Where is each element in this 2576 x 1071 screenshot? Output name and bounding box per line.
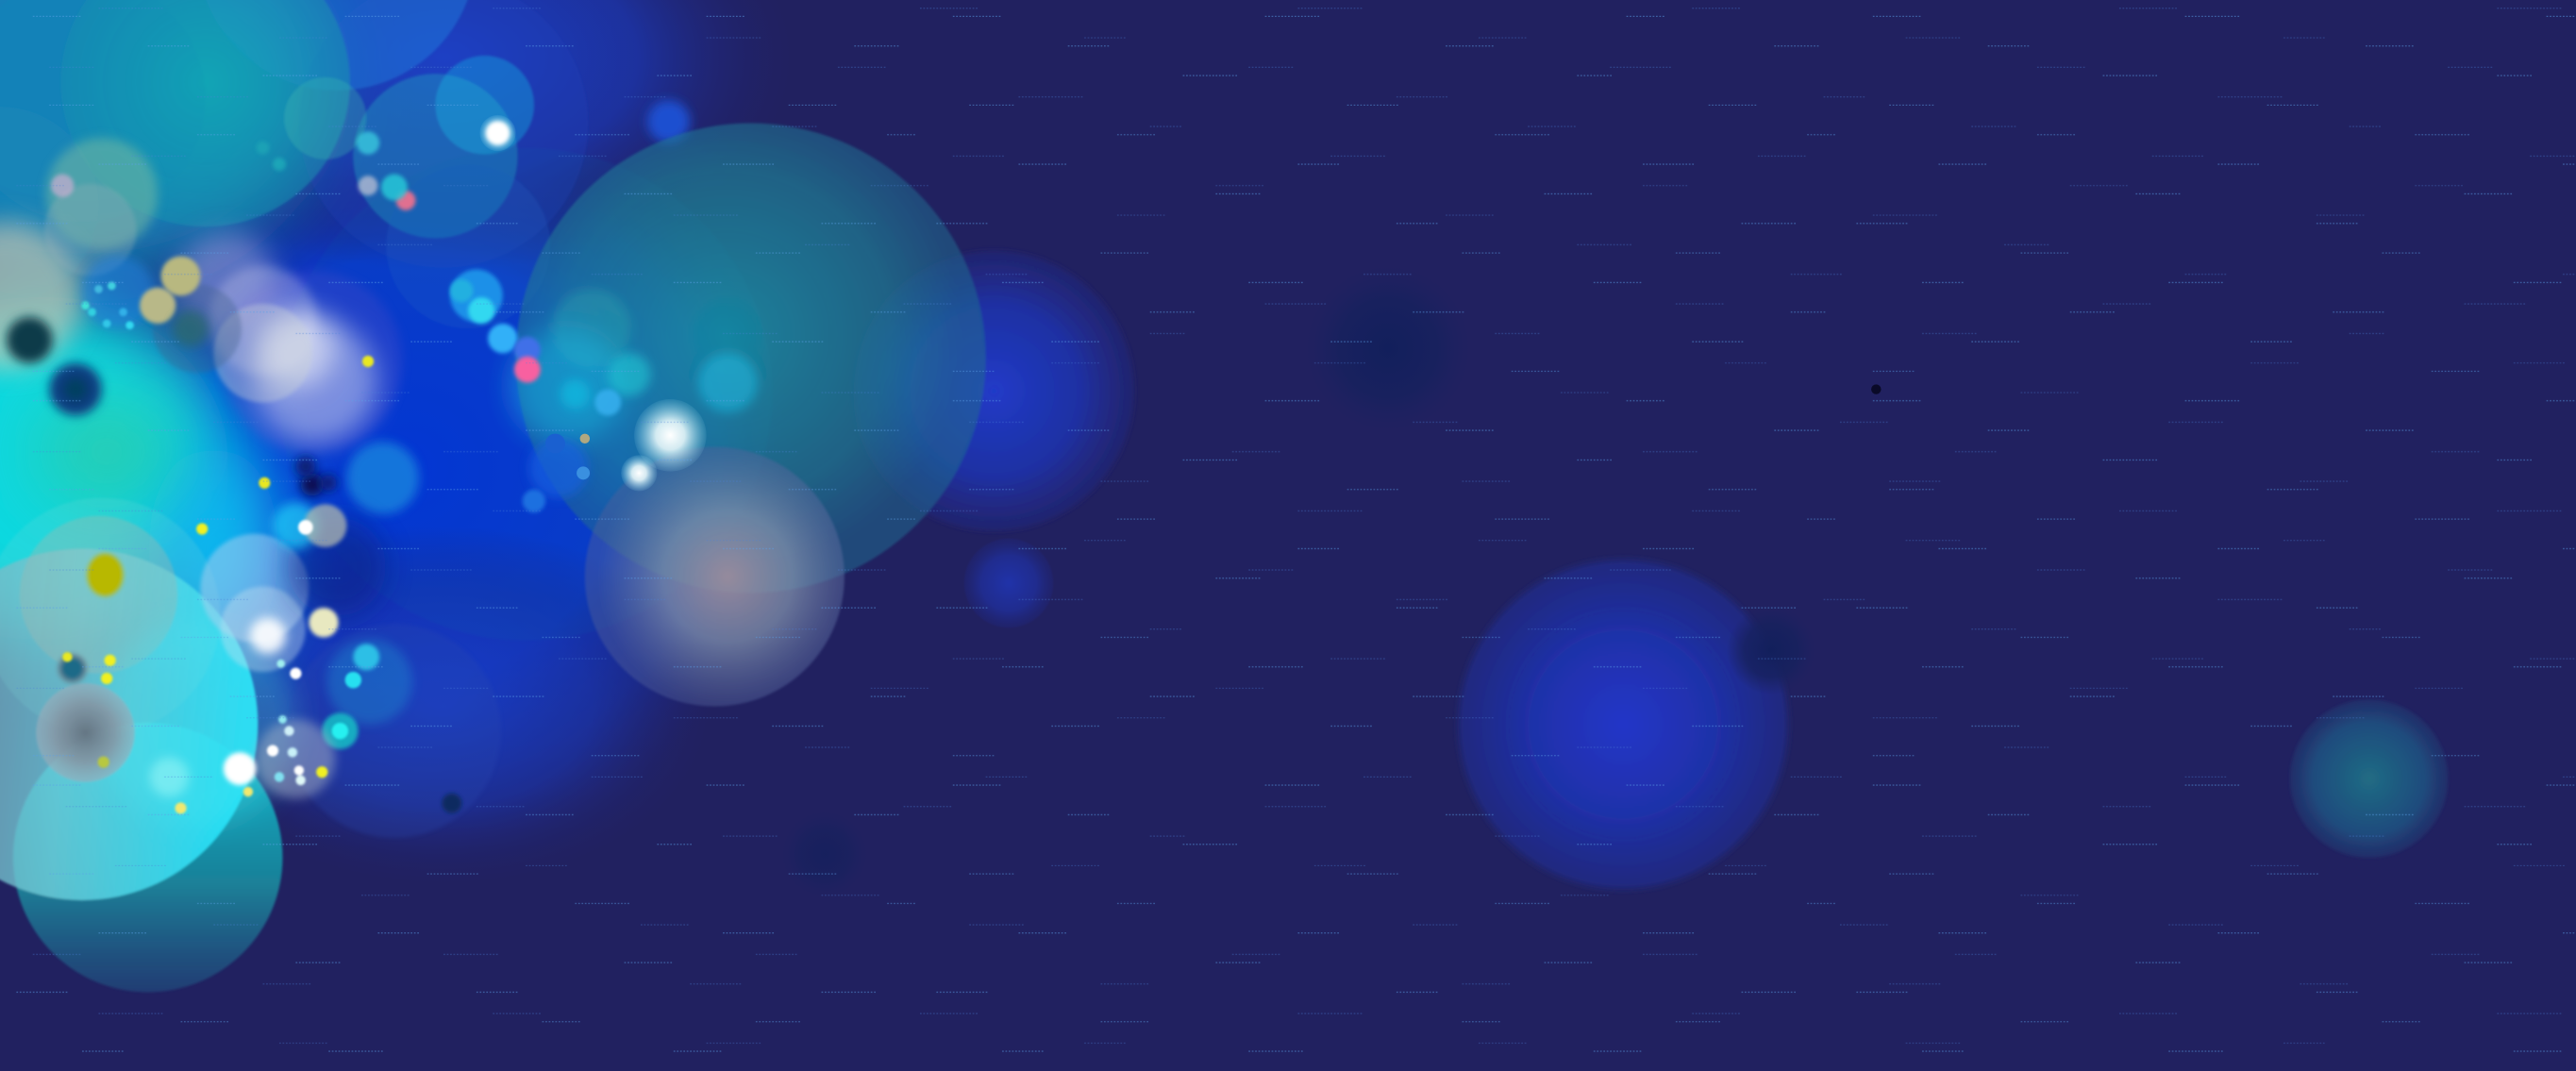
isolated background orbs: [782, 266, 2450, 896]
bright cluster of dots near teal circle: [257, 115, 707, 512]
small yellow and white dots: [62, 282, 374, 814]
pale circles upper left: [0, 138, 158, 415]
large faint circles top: [0, 0, 690, 328]
pale pink circle: [585, 446, 845, 707]
bottom left circles: [0, 497, 299, 992]
large teal circles right of the cluster: [279, 124, 1139, 641]
mid blobs lower cluster: [200, 457, 501, 838]
blue glow behind the cluster: [0, 0, 796, 887]
white lilac blobs: [140, 233, 419, 514]
